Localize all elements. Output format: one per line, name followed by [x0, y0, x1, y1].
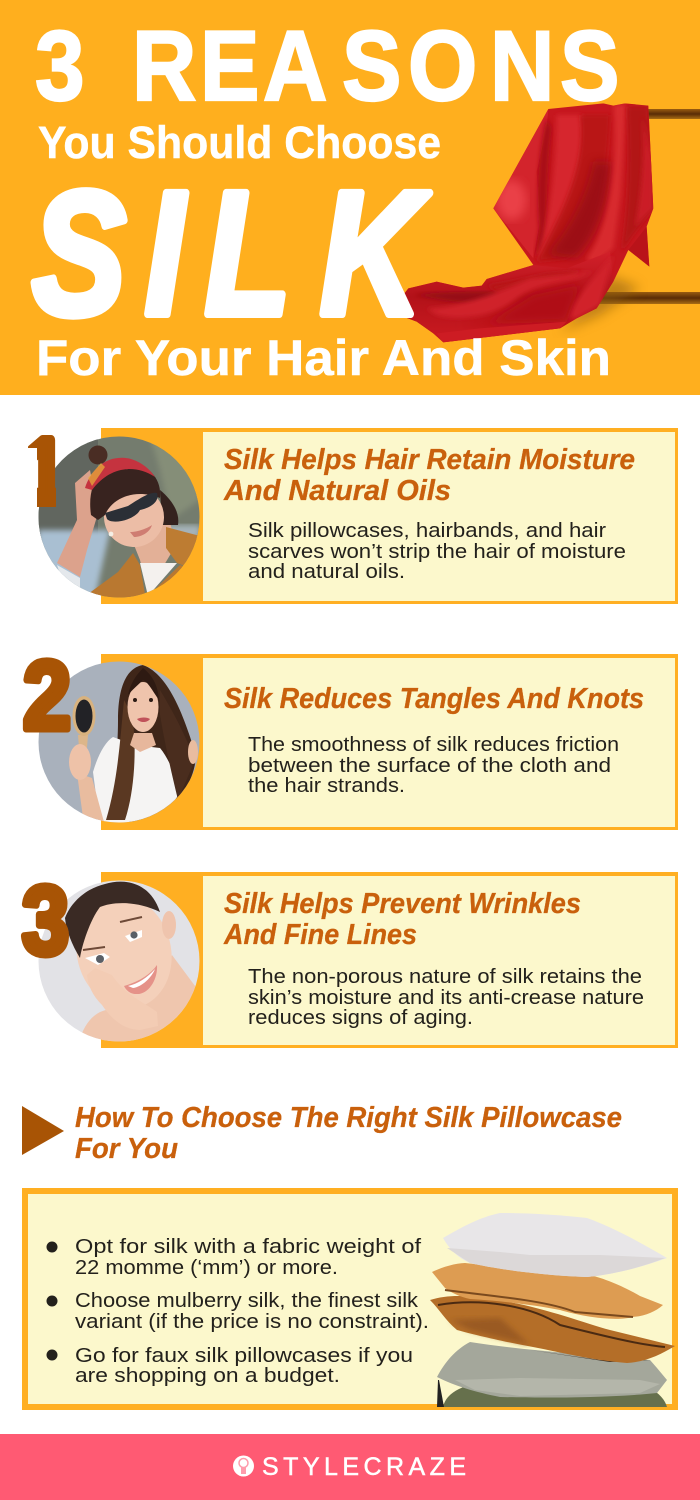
tip 3: are shopping on a budget.	[75, 1365, 340, 1387]
heading: Silk Reduces Tangles And Knots	[224, 683, 644, 715]
panel: reason 1	[26, 422, 678, 604]
body text: between the surface of the cloth and	[248, 755, 611, 777]
tip 2	[46, 1290, 429, 1333]
body text	[248, 734, 619, 797]
heading: And Fine Lines	[223, 919, 417, 951]
icon: red silk drape	[404, 103, 654, 342]
number 3: 3	[22, 866, 69, 975]
tip 1	[46, 1236, 422, 1279]
brand name: STYLECRAZE	[262, 1453, 466, 1481]
heading: Silk Helps Prevent Wrinkles	[224, 888, 581, 920]
arrow: section marker	[22, 1106, 64, 1155]
tip 1: 22 momme (‘mm’) or more.	[75, 1257, 338, 1279]
heading: how to choose: For You	[75, 1133, 178, 1165]
tip 2: variant (if the price is no constraint).	[75, 1311, 429, 1333]
panel: reason 2	[23, 641, 678, 830]
wooden rail upper	[646, 109, 700, 119]
body text: scarves won’t strip the hair of moisture	[248, 541, 626, 563]
tip 1: Opt for silk with a fabric weight of	[75, 1236, 422, 1258]
title: 3 REASONS: 3 REASONS	[35, 11, 619, 121]
heading: And Natural Oils	[223, 475, 451, 507]
heading	[223, 888, 581, 951]
number 2: 2	[23, 641, 71, 750]
panel: pillowcase tips	[22, 1188, 678, 1410]
photo: woman with silk hair scarf	[38, 436, 200, 600]
heading: how to choose: How To Choose The Right Silk Pillowcase	[75, 1102, 622, 1134]
body text	[248, 520, 626, 583]
heading: how to choose	[75, 1102, 622, 1165]
subtitle: You Should Choose: You Should Choose	[38, 117, 441, 168]
body text	[248, 966, 644, 1029]
body text: The non-porous nature of silk retains the	[248, 966, 642, 988]
body text: skin’s moisture and its anti-crease nature	[248, 987, 644, 1009]
tip 2: Choose mulberry silk, the finest silk	[75, 1290, 419, 1312]
footer band	[0, 1434, 700, 1500]
panel: reason 3	[22, 866, 678, 1048]
body text: Silk pillowcases, hairbands, and hair	[248, 520, 606, 542]
wooden rail lower	[598, 292, 700, 304]
body text: reduces signs of aging.	[248, 1007, 473, 1029]
body text: The smoothness of silk reduces friction	[248, 734, 619, 756]
header panel	[0, 0, 700, 395]
body text: the hair strands.	[248, 775, 405, 797]
number 1: 1	[26, 422, 64, 522]
heading: Silk Helps Hair Retain Moisture	[224, 444, 635, 476]
tip 3	[46, 1345, 413, 1387]
icon: stylecraze logo	[233, 1456, 254, 1476]
body text: and natural oils.	[248, 561, 405, 583]
title: SILK: SILK	[32, 155, 430, 352]
icon: stack of pillows	[430, 1213, 675, 1407]
photo: smiling woman with smooth skin	[38, 880, 200, 1048]
drape shadow	[560, 276, 640, 332]
heading	[223, 444, 635, 507]
subtitle: For Your Hair And Skin: For Your Hair And Skin	[36, 330, 611, 386]
tip 3: Go for faux silk pillowcases if you	[75, 1345, 413, 1367]
photo: woman brushing long hair	[38, 661, 200, 825]
